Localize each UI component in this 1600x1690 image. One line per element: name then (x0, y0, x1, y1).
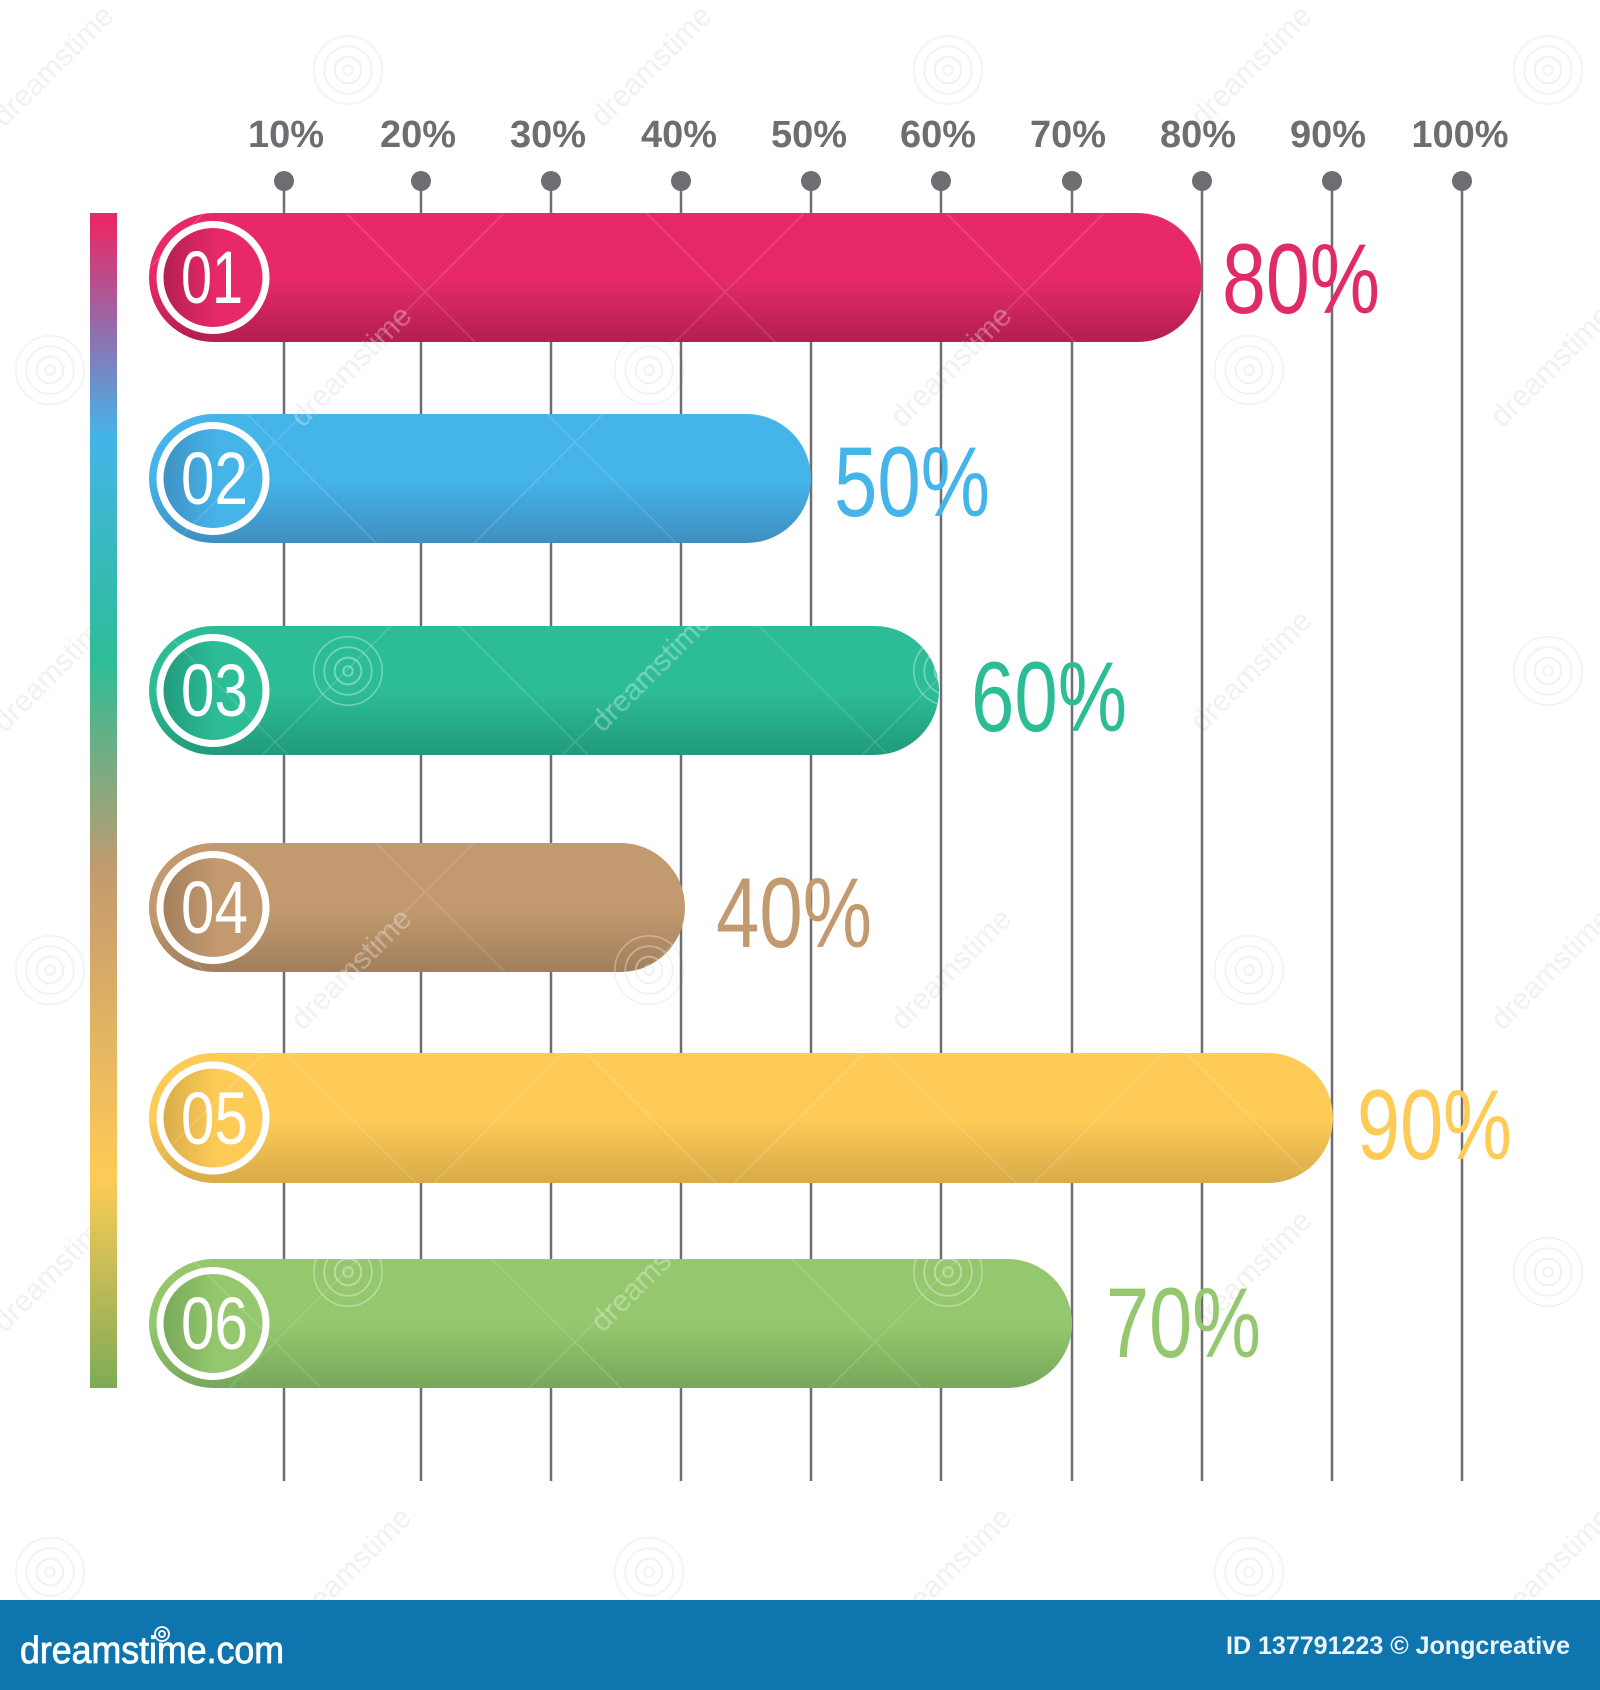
bar 04: 40% (149, 843, 685, 972)
watermark overlay on bars: dreamstime (584, 1204, 718, 1338)
axis percentage labels: 20% (380, 114, 456, 156)
left gradient strip (90, 213, 117, 1388)
watermark pattern: dreamstime (284, 902, 418, 1036)
axis percentage labels: 40% (641, 114, 717, 156)
axis percentage labels: 10% (248, 114, 324, 156)
value labels (716, 223, 1512, 1378)
axis percentage labels: 80% (1160, 114, 1236, 156)
bar 06: 70%: 06 (181, 1282, 248, 1365)
watermark pattern: dreamstime (884, 1501, 1018, 1635)
axis percentage labels (248, 114, 1509, 156)
watermark pattern: dreamstime (884, 902, 1018, 1036)
axis percentage labels: 60% (900, 114, 976, 156)
value labels: 90% (1357, 1069, 1512, 1180)
bar 02: 50%: 02 (181, 437, 248, 520)
footer band (0, 1600, 1600, 1690)
axis percentage labels: 70% (1030, 114, 1106, 156)
bar 01: 80% (149, 213, 1202, 342)
axis percentage labels: 90% (1290, 114, 1366, 156)
watermark pattern: dreamstime (584, 0, 718, 133)
bar 05: 90%: 05 (181, 1077, 248, 1160)
bar 03: 60%: 03 (181, 649, 248, 732)
watermark pattern: dreamstime (1184, 1204, 1318, 1338)
value labels: 40% (716, 857, 872, 968)
footer logo text: dreamstime.com (20, 1630, 284, 1672)
axis percentage labels: 100% (1411, 114, 1509, 156)
watermark pattern: dreamstime (284, 299, 418, 433)
bar 02: 50% (149, 414, 811, 543)
watermark overlay on bars: dreamstime (284, 902, 418, 1036)
bar 05: 90% (149, 1053, 1333, 1183)
watermark pattern: dreamstime (1184, 0, 1318, 133)
watermark overlay on bars: dreamstime (584, 604, 718, 738)
bar 06: 70% (149, 1259, 1072, 1388)
watermark pattern: dreamstime (884, 299, 1018, 433)
value labels: 60% (971, 641, 1127, 752)
bar 04: 40%: 04 (181, 866, 248, 949)
bar 01: 80%: 01 (181, 236, 243, 319)
value labels: 80% (1222, 223, 1380, 334)
footer logo spiral (155, 1627, 169, 1641)
image id credit: ID 137791223 © Jongcreative (1226, 1632, 1570, 1660)
watermark overlay on bars: dreamstime (884, 299, 1018, 433)
watermark pattern: dreamstime (284, 1501, 418, 1635)
axis percentage labels: 30% (510, 114, 586, 156)
value labels: 70% (1106, 1267, 1261, 1378)
watermark overlay on bars (150, 213, 1305, 1388)
axis grid lines with dots (274, 171, 1472, 1481)
value labels: 50% (834, 426, 990, 537)
watermark overlay on bars: dreamstime (284, 299, 418, 433)
axis percentage labels: 50% (771, 114, 847, 156)
watermark pattern: dreamstime (1184, 604, 1318, 738)
bar 03: 60% (149, 626, 939, 755)
